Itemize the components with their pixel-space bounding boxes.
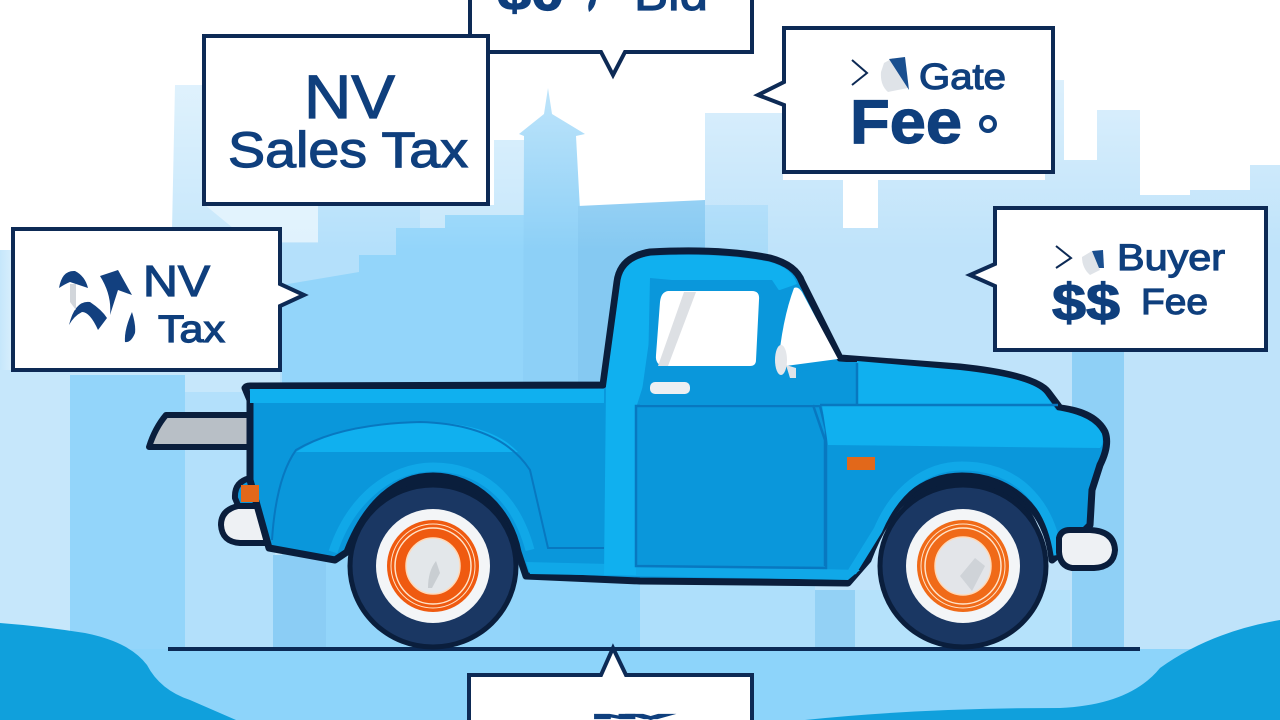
tailgate <box>149 415 252 447</box>
upper cab panel <box>640 280 800 405</box>
city skyline background <box>0 80 1280 650</box>
rear wheel <box>350 485 516 647</box>
cowl <box>790 362 857 405</box>
sill strip <box>526 562 860 580</box>
front wheel <box>880 485 1046 647</box>
callout: NV sales tax <box>204 36 488 204</box>
chevron icon <box>1056 246 1071 268</box>
bed top rail <box>250 389 604 403</box>
callout: bid <box>470 0 752 75</box>
gate label: Gate <box>919 56 1006 97</box>
right hill <box>805 620 1280 720</box>
dollar signs: $$ <box>1052 274 1120 332</box>
callout: bottom NV <box>469 648 752 720</box>
front arch shadow <box>878 474 1048 562</box>
NV heading: NV <box>304 63 395 131</box>
sales tax label: Sales Tax <box>228 122 468 178</box>
small circle icon <box>981 117 995 131</box>
NV label: NV <box>143 257 211 306</box>
rear marker <box>241 485 259 502</box>
fender marker <box>847 457 875 470</box>
ground band <box>0 649 1280 720</box>
ground line <box>168 647 1140 651</box>
slash mark <box>588 0 596 12</box>
rear wheel arch trim <box>333 467 530 552</box>
rear bumper <box>221 506 272 543</box>
front wheel arch trim <box>852 466 1058 572</box>
rear arch shadow <box>352 474 516 550</box>
left hill <box>0 623 236 720</box>
front bumper <box>1059 530 1115 568</box>
window reflection <box>658 292 696 366</box>
truck body <box>245 251 1107 583</box>
mirror bracket <box>786 365 796 378</box>
side mirror <box>775 345 787 375</box>
rear fender top <box>296 422 518 452</box>
fee label: Fee <box>850 88 962 157</box>
door panel <box>636 406 826 568</box>
cab pillar <box>604 255 797 575</box>
door handle <box>650 382 690 394</box>
hood <box>822 361 1103 448</box>
abstract tax icon <box>59 270 135 342</box>
fee label: Fee <box>1141 281 1208 322</box>
hood lines <box>813 363 1058 566</box>
pickup truck <box>149 251 1115 647</box>
chevron icon <box>852 60 867 85</box>
ticket icon <box>1082 250 1104 275</box>
windshield <box>778 288 838 367</box>
side window <box>656 291 759 366</box>
callout: buyer fee <box>970 208 1266 350</box>
ticket icon <box>881 57 909 92</box>
rear fender edge <box>272 422 604 548</box>
buyer label: Buyer <box>1117 237 1225 278</box>
rear light housing <box>235 478 272 510</box>
tax label: Tax <box>158 309 225 351</box>
callout: gate fee <box>758 28 1053 172</box>
callout: NV tax <box>13 229 304 370</box>
